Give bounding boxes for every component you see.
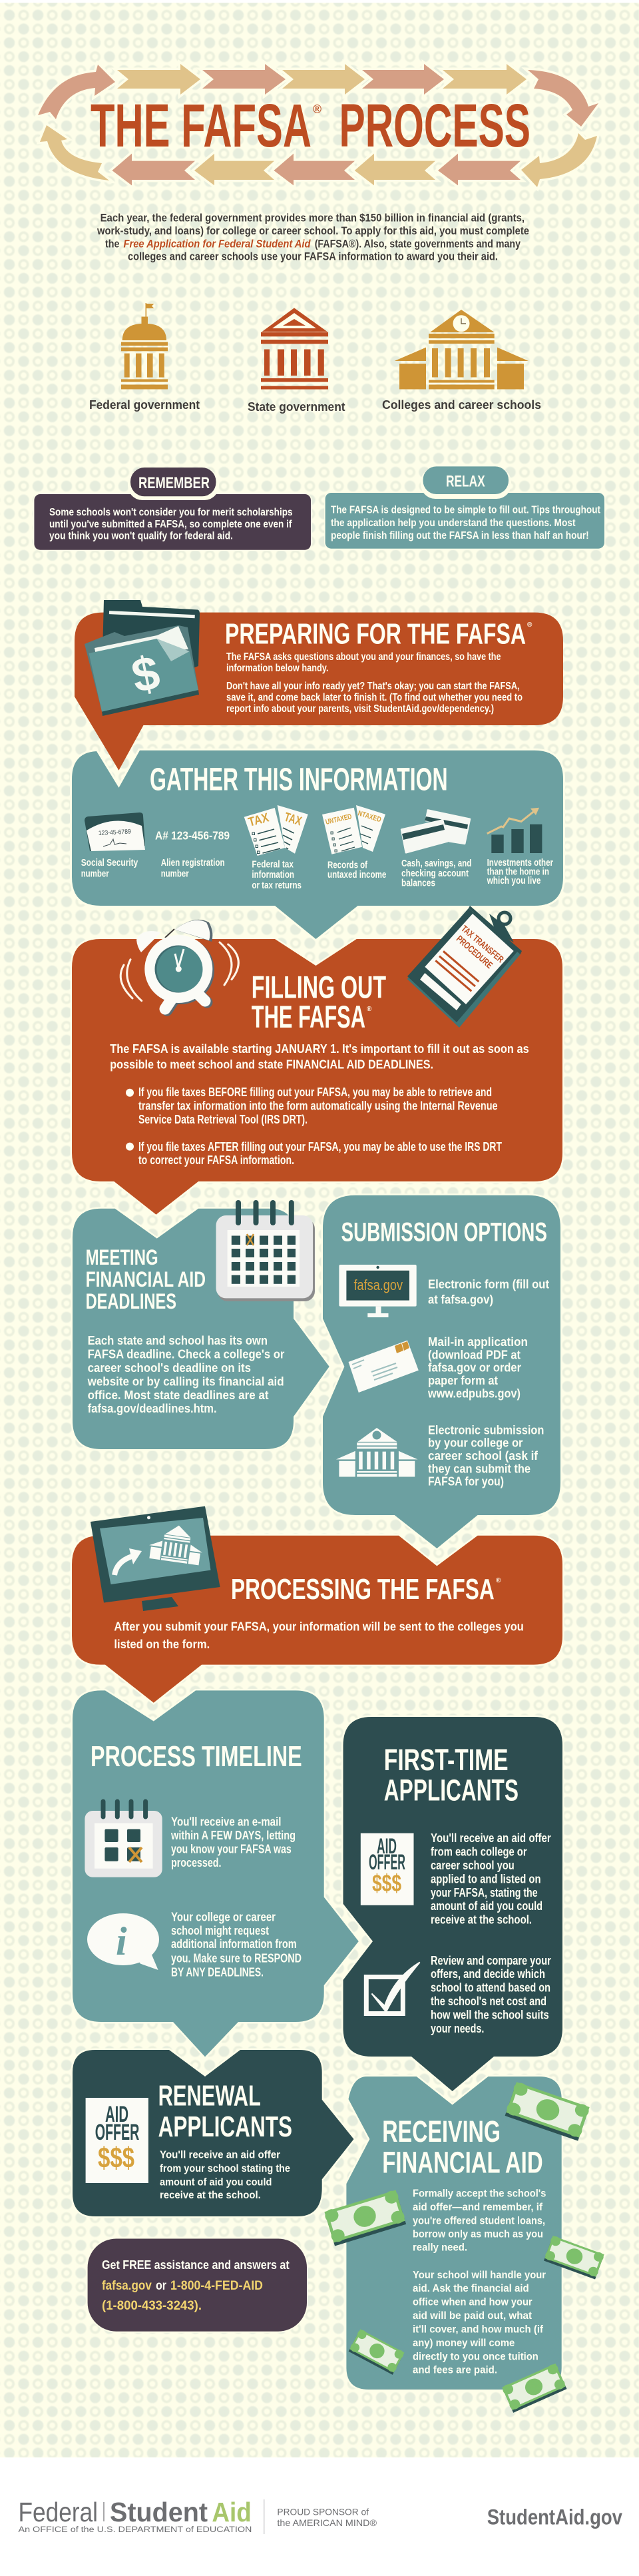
icon: school building white [336,1428,418,1476]
gather item labels: Federal tax [252,858,294,870]
intro paragraph [97,212,529,263]
footer sponsor text: PROUD SPONSOR of [277,2507,369,2517]
icon: untaxed documents [322,805,385,854]
panel: first-time applicants: your FAFSA, stating the [431,1886,538,1899]
panel: filling out the fafsa: possible to meet school and state FINANCIAL AID DEADLINES. [110,1058,433,1071]
intro paragraph: Each year, the federal government provides more than $150 billion in financial aid (grants, [101,212,525,224]
panel: first-time applicants: school to attend based on [431,1981,550,1995]
icon: tax documents: TAX [247,810,271,830]
panel: relax: the application help you understand the questions. Most [331,517,576,529]
panel: remember: until you've submitted a FAFSA, so complete one even if [49,519,292,530]
icon: federal government capitol [121,303,168,389]
panel: first-time applicants: applied to and listed on [431,1872,540,1885]
panel: renewal applicants: APPLICANTS [158,2110,292,2143]
panel: renewal applicants: from your school stating the [160,2163,290,2174]
panel: submission options: (download PDF at [428,1348,521,1361]
panel: receiving financial aid: Your school will handle your [413,2270,546,2281]
icon: state government building [261,308,328,390]
panel: process timeline: PROCESS TIMELINE [91,1740,302,1773]
panel: gather this information [72,751,563,939]
gather item labels: number [161,868,189,880]
icon: social security card [85,812,145,851]
panel: remember [34,468,311,550]
panel: filling out the fafsa: The FAFSA is available starting JANUARY 1. It's important to fill it out as soon as [110,1042,529,1056]
intro paragraph: colleges and career schools use your FAFSA information to award you their aid. [128,250,498,263]
panel: meeting financial aid deadlines: DEADLINES [86,1289,176,1313]
panel: first-time applicants: from each college or [431,1845,527,1858]
intro paragraph: Free Application for Federal Student Aid [124,237,311,250]
intro paragraph: (FAFSA®). Also, state governments and many [315,237,521,250]
intro paragraph: the [105,237,119,250]
panel: free assistance: Get FREE assistance and answers at [102,2258,290,2272]
panel: filling out the fafsa: to correct your FAFSA information. [138,1153,294,1167]
panel: process timeline: BY ANY DEADLINES. [171,1966,264,1979]
panel: process timeline: you. Make sure to RESPOND [171,1951,302,1965]
panel: preparing for the fafsa: Don't have all your info ready yet? That's okay; you can start the FAFSA, [226,681,520,692]
icon: small calendar [85,1801,162,1877]
footer logo: federal student aid [19,2497,252,2534]
icon: envelope [349,1341,419,1393]
panel: free assistance: 1-800-4-FED-AID [170,2279,263,2293]
panel: first-time applicants: career school you [431,1859,515,1872]
gather item labels: number [81,868,109,880]
panel: submission options: www.edpubs.gov) [427,1387,521,1400]
panel: receiving financial aid [346,2077,562,2390]
gather item labels: Social Security [81,857,138,868]
gather item labels: checking account [401,868,469,879]
panel: free assistance: fafsa.gov [102,2279,152,2293]
panel: process timeline: you know your FAFSA was [171,1842,292,1855]
panel: submission options: Electronic form (fill out [428,1277,549,1291]
panel: relax: RELAX [446,473,485,491]
panel: processing the fafsa [72,1536,562,1703]
title: PROCESS [339,92,531,160]
icon: check box [366,1962,420,2014]
panel: submission options: SUBMISSION OPTIONS [341,1218,547,1247]
panel: process timeline: You'll receive an e-mail [171,1815,281,1829]
gather item labels: information [252,869,294,880]
panel: meeting financial aid deadlines: MEETING [86,1245,158,1269]
panel: renewal applicants: amount of aid you could [160,2177,272,2188]
panel: processing the fafsa: ® [496,1577,501,1584]
panel: receiving financial aid: any) money will come [413,2338,515,2349]
footer logo: federal student aid: Federal [19,2497,98,2527]
panel: first-time applicants: offers, and decide which [431,1967,545,1981]
icon: tax transfer clipboard: TAX TRANSFER [459,923,506,964]
gather item labels: Cash, savings, and [401,858,471,869]
panel: filling out the fafsa [72,939,562,1215]
icon: folders with dollar sign [85,600,200,716]
icon: social security card: 123-45-6789 [99,828,131,837]
building labels [89,398,541,414]
panel: filling out the fafsa: If you file taxes BEFORE filling out your FAFSA, you may be able to retrieve and [138,1086,492,1099]
footer logo: federal student aid: Aid [212,2497,252,2527]
panel: process timeline: within A FEW DAYS, letting [170,1829,296,1842]
panel: meeting financial aid deadlines [73,1209,329,1449]
gather item labels: which you live [487,875,540,886]
panel: submission options: they can submit the [428,1462,531,1475]
icon: aid offer document: $$$ [372,1869,401,1897]
footer divider [264,2499,265,2534]
panel: receiving financial aid: Formally accept the school's [413,2188,546,2200]
panel: processing the fafsa: After you submit your FAFSA, your information will be sent to the colleges you [114,1620,524,1634]
gather item labels: than the home in [487,866,549,878]
panel: first-time applicants: You'll receive an aid offer [431,1831,551,1845]
panel: receiving financial aid: and fees are paid. [413,2365,497,2376]
gather item labels: Investments other [487,857,553,868]
panel: remember: REMEMBER [138,474,210,492]
icon: tax transfer clipboard: PROCEDURE [455,933,495,970]
panel: free assistance [88,2239,307,2332]
panel: renewal applicants [73,2050,354,2216]
icon: aid offer document [361,1833,414,1905]
panel: receiving financial aid: RECEIVING [382,2114,501,2148]
arrows ring around title [38,64,598,187]
icon: aid offer document: OFFER [369,1850,405,1874]
panel: receiving financial aid: really need. [413,2242,467,2254]
panel: receiving financial aid: aid will be paid out, what [413,2310,532,2322]
panel: submission options: career school (ask if [428,1449,538,1462]
panel: submission options: Electronic submission [428,1424,544,1437]
panel: first-time applicants: amount of aid you could [431,1899,542,1913]
panel: preparing for the fafsa: ® [527,621,532,629]
panel: meeting financial aid deadlines: career school's deadline on its [88,1361,251,1375]
footer logo: federal student aid: Student [110,2497,208,2527]
panel: relax [325,466,604,549]
panel: process timeline: school might request [171,1924,269,1937]
gather item labels: or tax returns [252,880,302,891]
panel: first-time applicants: Review and compare your [431,1954,551,1967]
panel: first-time applicants: APPLICANTS [384,1773,519,1807]
footer sponsor text: the AMERICAN MIND® [277,2517,377,2528]
building labels: Colleges and career schools [382,398,541,412]
panel: receiving financial aid: office when and how your [413,2296,532,2308]
icon: info speech bubble: i [116,1919,127,1963]
panel: submission options [323,1195,560,1548]
panel: preparing for the fafsa: The FAFSA asks questions about you and your finances, so have the [226,651,501,663]
panel: receiving financial aid: aid offer—and remember, if [413,2202,543,2213]
panel: preparing for the fafsa: save it, and come back later to finish it. (To find out whether you need to [226,692,523,703]
gather item labels: untaxed income [327,869,386,880]
panel: process timeline: additional information from [171,1937,297,1951]
panel: preparing for the fafsa: PREPARING FOR THE FAFSA [225,618,526,650]
panel: first-time applicants: the school's net cost and [431,1995,546,2008]
gather item labels: Alien registration [161,857,225,868]
panel: meeting financial aid deadlines: website or by calling its financial aid [87,1375,284,1388]
panel: filling out the fafsa: ® [367,1006,372,1013]
panel: submission options: paper form at [428,1374,498,1387]
panel: renewal applicants: receive at the school. [160,2190,261,2201]
panel: submission options: fafsa.gov or order [428,1361,521,1375]
gather item labels: Records of [327,860,368,871]
panel: meeting financial aid deadlines: office. Most state deadlines are at [88,1389,269,1402]
panel: process timeline: Your college or career [171,1910,276,1923]
panel: meeting financial aid deadlines: Each state and school has its own [88,1334,268,1347]
gather item labels [81,857,553,891]
panel: renewal applicants: AID [105,2102,128,2127]
panel: filling out the fafsa: FILLING OUT [252,969,386,1004]
icon: dollar bills [323,2081,605,2413]
panel: receiving financial aid: it'll cover, and how much (if [413,2324,544,2335]
panel: filling out the fafsa: Service Data Retrieval Tool (IRS DRT). [138,1113,308,1126]
panel: submission options: by your college or [428,1437,523,1450]
icon: calendar [216,1203,315,1301]
panel: relax: people finish filling out the FAFSA in less than half an hour! [331,530,589,541]
footer sponsor text [277,2507,377,2528]
panel: meeting financial aid deadlines: FAFSA deadline. Check a college's or [88,1348,284,1361]
intro paragraph: work-study, and loans) for college or career school. To apply for this aid, you must complete [97,224,529,237]
title: THE FAFSA [91,92,312,160]
panel: filling out the fafsa: THE FAFSA [252,999,365,1034]
footer logo: federal student aid: An OFFICE of the U.S. DEPARTMENT of EDUCATION [19,2526,252,2534]
panel: first-time applicants [343,1717,562,2091]
panel: processing the fafsa: PROCESSING THE FAFSA [231,1573,495,1606]
panel: remember: Some schools won't consider you for merit scholarships [49,507,293,518]
panel: process timeline [73,1690,359,2057]
panel: receiving financial aid: you're offered student loans, [413,2215,545,2226]
panel: submission options: FAFSA for you) [428,1475,504,1488]
title: ® [313,103,321,116]
panel: renewal applicants: OFFER [95,2120,139,2145]
panel: receiving financial aid: borrow only as much as you [413,2228,543,2240]
icon: bank cards [401,810,470,852]
panel: gather this information: GATHER THIS INFORMATION [150,762,448,798]
panel: submission options: Mail-in application [428,1335,528,1349]
panel: filling out the fafsa: If you file taxes AFTER filling out your FAFSA, you may be able to use the IRS DRT [138,1140,502,1153]
panel: renewal applicants: RENEWAL [158,2079,261,2112]
panel: receiving financial aid: aid. Ask the financial aid [413,2283,529,2294]
panel: meeting financial aid deadlines: FINANCIAL AID [86,1267,206,1291]
panel: free assistance: (1-800-433-3243). [102,2299,202,2313]
panel: meeting financial aid deadlines: fafsa.gov/deadlines.htm. [88,1402,217,1415]
icon: investments chart [487,808,542,853]
icon: computer with fafsa.gov [339,1265,417,1317]
panel: preparing for the fafsa [75,613,563,771]
icon: tax documents [244,805,308,856]
icon: alarm clock [120,920,238,1010]
panel: renewal applicants: $$$ [98,2142,134,2174]
panel: first-time applicants: FIRST-TIME [384,1743,509,1777]
icon: untaxed documents: UNTAXED [325,812,353,826]
panel: preparing for the fafsa: information below handy. [226,663,329,674]
icon: colleges and career schools building [395,310,529,389]
panel: first-time applicants: your needs. [431,2022,484,2035]
panel: process timeline: processed. [171,1856,221,1869]
icon: aid offer document: AID [377,1834,397,1858]
panel: processing the fafsa: listed on the form. [114,1638,210,1651]
panel: renewal applicants: You'll receive an aid offer [160,2149,280,2160]
building labels: Federal government [89,398,200,412]
building labels: State government [248,400,345,414]
gather item labels: balances [401,878,435,889]
panel: preparing for the fafsa: report info about your parents, visit StudentAid.gov/dependency.) [226,703,494,715]
panel: receiving financial aid: FINANCIAL AID [382,2146,543,2180]
icon: tax documents: TAX [283,810,304,828]
panel: remember: you think you won't qualify for federal aid. [49,530,233,541]
panel: receiving financial aid: directly to you once tuition [413,2351,538,2363]
icon: folders with dollar sign: $ [127,646,164,703]
icon: monitor sending to school [91,1506,220,1611]
panel: first-time applicants: how well the school suits [431,2008,549,2021]
icon: info speech bubble [87,1913,159,1970]
icon: computer with fafsa.gov: fafsa.gov [354,1277,403,1293]
panel: free assistance: or [156,2279,167,2293]
alien number: A# 123-456-789 [155,829,230,842]
panel: first-time applicants: receive at the school. [431,1913,532,1927]
icon: tax transfer clipboard [407,906,522,1028]
panel: filling out the fafsa: transfer tax information into the form automatically using the Internal Revenue [138,1099,498,1112]
icon: untaxed documents: NTAXED [357,809,382,824]
panel: submission options: at fafsa.gov) [428,1293,493,1307]
